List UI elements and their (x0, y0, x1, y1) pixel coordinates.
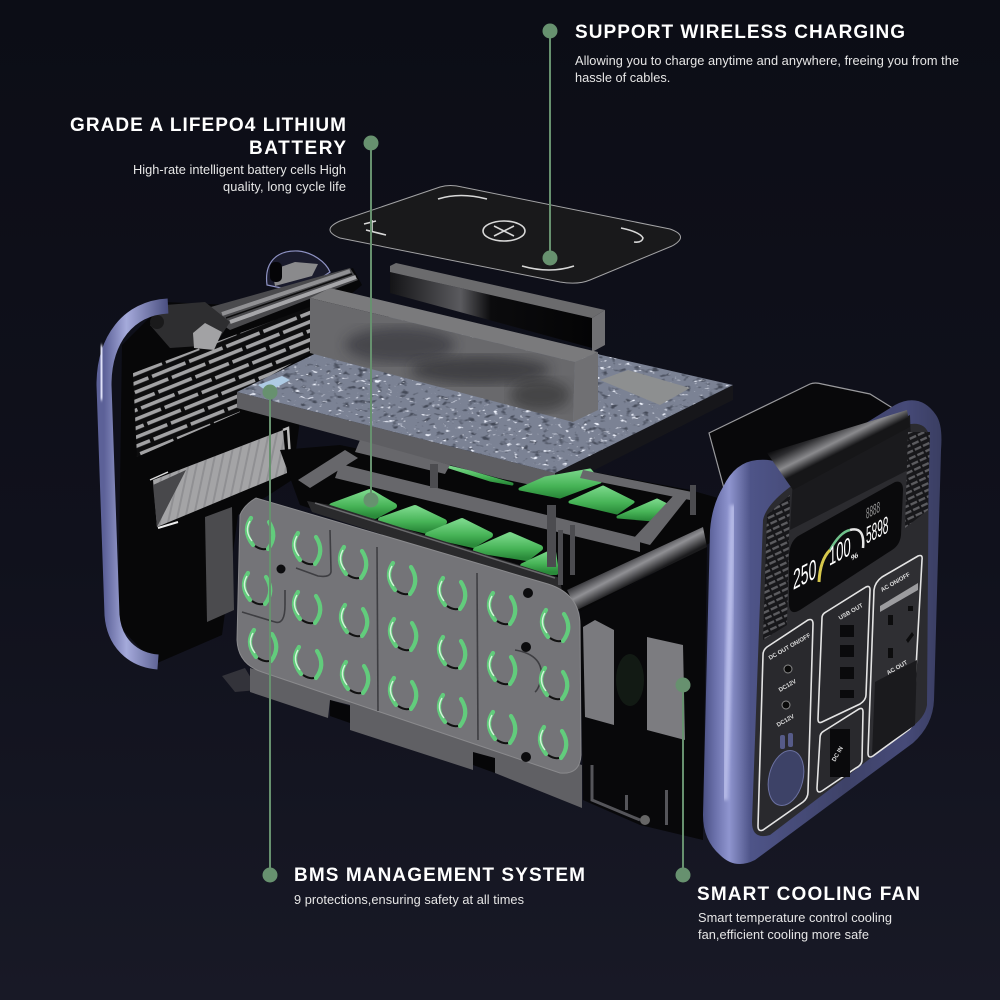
AC output group: AC OUT (886, 660, 909, 677)
front end cap of the power station (703, 383, 941, 864)
callout: lithium battery: BATTERY (249, 138, 346, 159)
callout: wireless charging (575, 22, 959, 85)
plate seams (242, 530, 541, 740)
DC output group: DC12V (778, 679, 798, 694)
callout: lithium battery: High-rate intelligent battery cells High (133, 162, 346, 177)
battery module plate (237, 498, 582, 808)
USB output group: USB OUT (838, 603, 865, 622)
pad markings (364, 196, 643, 270)
plate skirt (250, 668, 582, 808)
lower parts (592, 765, 640, 820)
circuit board PCB (237, 310, 733, 490)
battery gauge arc (819, 550, 830, 582)
power output reading: 5898 (866, 510, 888, 549)
DC output group: DC OUT ON/OFF (768, 633, 812, 662)
right vent (905, 432, 930, 528)
back heat sink bar (390, 263, 605, 352)
DC input group: DC IN (832, 746, 845, 763)
cell openings (244, 518, 568, 758)
callout: cooling fan: fan,efficient cooling more safe (698, 927, 869, 942)
metal shelf (298, 440, 692, 552)
front heat sink bar (310, 288, 598, 422)
rear top rail (150, 268, 358, 350)
leader line: wireless charging (542, 24, 558, 266)
callout: wireless charging: Allowing you to charge anytime and anywhere, freeing you from the (575, 53, 959, 68)
lower AC socket (872, 660, 917, 755)
callout: lithium battery (70, 115, 346, 194)
DC output group: DC12V (776, 714, 796, 729)
right heat sink (647, 637, 685, 740)
handle loop on rear cap (267, 251, 330, 292)
base foot (222, 668, 258, 692)
leader line: cooling fan (676, 678, 690, 882)
callout: BMS: 9 protections,ensuring safety at all times (294, 892, 524, 907)
frame bar across battery (307, 464, 696, 592)
LCD display (789, 482, 903, 612)
DC input group (817, 708, 863, 792)
PCB bright pad (258, 376, 290, 392)
mounting holes (276, 564, 533, 762)
rear cap black body (118, 268, 362, 664)
left end cap of the power station (101, 251, 362, 692)
battery percent reading: 100 (829, 532, 851, 572)
callout: cooling fan (697, 884, 920, 942)
callout: BMS (294, 865, 585, 907)
callout: cooling fan: Smart temperature control cooling (698, 910, 892, 925)
cooling fan (616, 654, 644, 706)
green battery cells front row (332, 492, 556, 572)
DC output group (758, 620, 813, 830)
carry handle window (709, 383, 907, 492)
left vent (763, 495, 790, 640)
USB output group (818, 586, 870, 723)
frame posts (430, 464, 696, 585)
wireless charging pad (330, 186, 681, 283)
callout: lithium battery: quality, long cycle life (223, 179, 346, 194)
AC output group (868, 556, 922, 757)
callout: wireless charging: SUPPORT WIRELESS CHARGING (575, 22, 905, 43)
skirt notches (330, 700, 495, 773)
callout: wireless charging: hassle of cables. (575, 70, 670, 85)
leader line: BMS (262, 384, 278, 882)
rear frame highlight (101, 345, 102, 400)
AC output group: AC ON/OFF (880, 572, 912, 594)
car socket (763, 747, 809, 809)
power input reading: 250 (793, 552, 816, 596)
green battery cells back row (449, 467, 673, 520)
metal tube (567, 527, 707, 610)
right internal electronics (567, 527, 707, 840)
carry handle bar (767, 410, 910, 490)
rear cap cooling fins (133, 307, 310, 457)
PCB chip (600, 370, 690, 405)
rear cap ribbed plate (150, 428, 291, 528)
callout: cooling fan: SMART COOLING FAN (697, 884, 920, 905)
frame highlight (725, 505, 733, 800)
internal frame behind battery (280, 445, 725, 612)
handle underside recess (790, 415, 912, 530)
upper display reading: 8888 (866, 499, 880, 523)
left heat sink (583, 620, 614, 725)
rear cap blue frame (104, 306, 168, 662)
front inner panel (752, 424, 929, 836)
leader line: lithium battery (364, 136, 378, 508)
callout: lithium battery: GRADE A LIFEPO4 LITHIUM (70, 115, 346, 136)
callout: BMS: BMS MANAGEMENT SYSTEM (294, 865, 585, 886)
front cap blue frame (703, 400, 941, 864)
block between cap and battery (205, 507, 234, 622)
percent sign: % (851, 550, 858, 563)
upper AC socket marks (888, 606, 914, 658)
